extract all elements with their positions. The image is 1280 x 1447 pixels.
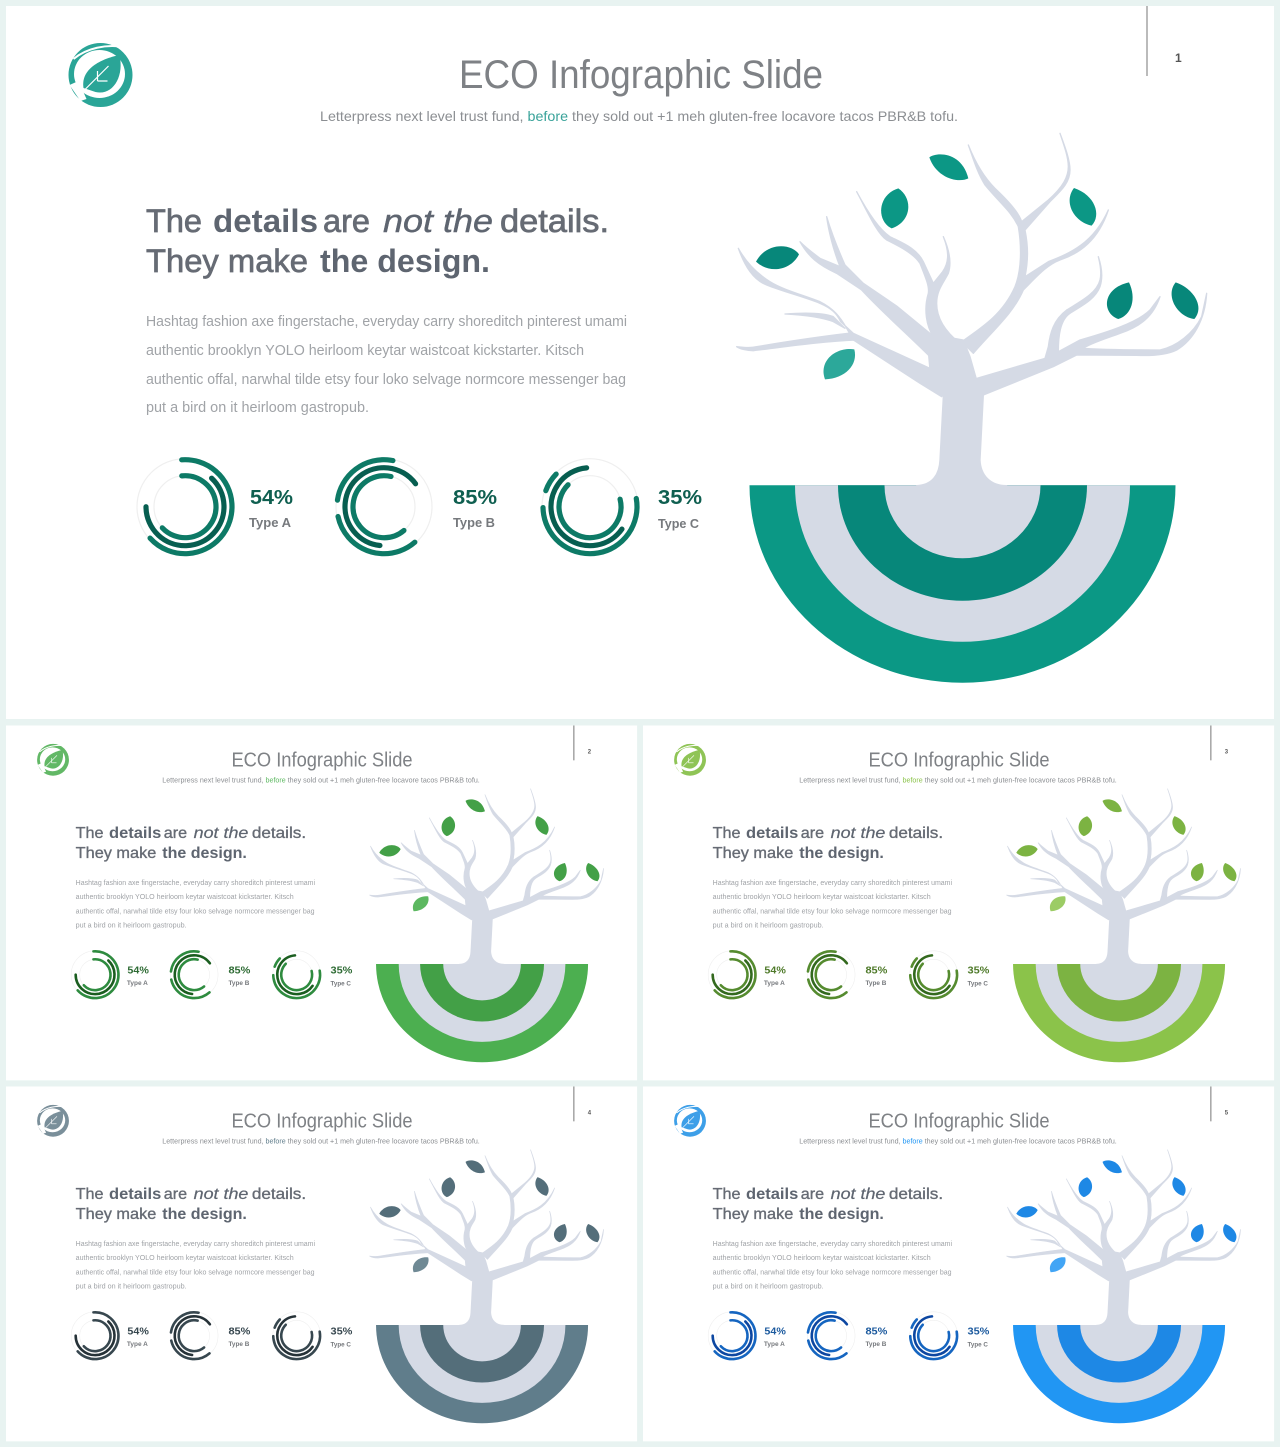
ring chart: Type A: Type A [127,980,148,987]
heading: not the [194,1186,249,1203]
ring chart: Type C: Type C [331,1341,351,1348]
ring chart: Type A: 54% [250,487,293,509]
heading: are [164,825,187,842]
ring chart: Type C: Type C [968,980,988,987]
heading: not the [383,203,493,239]
body text: authentic offal, narwhal tilde etsy four loko selvage normcore messenger bag [76,907,315,916]
ring chart: Type A: Type A [249,515,292,530]
body text: put a bird on it heirloom gastropub. [146,400,369,416]
body text: Hashtag fashion axe fingerstache, everyday carry shoreditch pinterest umami [713,878,952,887]
heading: are [801,825,824,842]
ring chart: Type A [68,947,149,1002]
slide 3 background [643,726,1274,1080]
ring chart: Type B: Type B [865,980,887,987]
page number [574,1086,592,1121]
heading: details [213,203,318,239]
subtitle: Letterpress next level trust fund, before they sold out +1 meh gluten-free locavore tacos PBR&B tofu. [799,1139,1117,1146]
semicircle soil bands [376,1325,588,1423]
slide 2 background [6,726,637,1080]
ring chart: Type A [130,452,293,562]
body text: authentic offal, narwhal tilde etsy four loko selvage normcore messenger bag [76,1268,315,1277]
body text: authentic brooklyn YOLO heirloom keytar waistcoat kickstarter. Kitsch [76,1253,294,1262]
heading: are [801,1186,824,1203]
heading: details [109,825,161,842]
heading: are [164,1186,187,1203]
body text: Hashtag fashion axe fingerstache, everyday carry shoreditch pinterest umami [76,878,315,887]
heading: details [746,825,798,842]
icon: leaf logo [37,1105,69,1137]
ring chart: Type A [705,947,786,1002]
semicircle soil bands [1013,1325,1225,1423]
heading: not the [831,825,886,842]
page number [1147,6,1182,76]
ring chart: Type C [530,446,702,567]
heading: the design. [162,845,247,862]
heading: the design. [162,1206,247,1223]
slide 4 background [6,1086,637,1441]
title: ECO Infographic Slide [231,1110,413,1132]
body text [146,314,627,416]
ring chart: Type B: 85% [453,487,497,509]
heading: details. [500,203,609,239]
slide 5 background [643,1086,1274,1441]
tree [370,789,604,964]
panel: slide 1 teal [6,6,1274,719]
panel: slide 4 slate [6,1086,637,1441]
panel: slide 3 lime [643,726,1274,1080]
heading: They make [713,845,793,862]
ring chart: Type C [267,945,353,1005]
ring chart: Type A: 54% [764,1326,786,1337]
ring chart: Type A: 54% [127,1326,149,1337]
ring chart: Type B: 85% [228,965,251,976]
heading [76,1186,306,1223]
heading [713,825,943,862]
heading: They make [76,845,156,862]
icon: leaf logo [674,1105,706,1137]
heading: They make [713,1206,793,1223]
body text: authentic offal, narwhal tilde etsy four loko selvage normcore messenger bag [713,907,952,916]
ring chart: Type B: Type B [228,980,250,987]
heading: The [713,825,741,842]
semicircle soil bands [750,485,1176,683]
semicircle soil bands [376,964,588,1062]
ring chart: Type B: Type B [453,515,495,530]
body text [76,878,315,930]
ring chart: Type B [318,440,497,573]
ring chart: Type A: 54% [127,965,149,976]
heading: the design. [320,243,490,279]
body text: put a bird on it heirloom gastropub. [76,921,187,930]
ring chart: Type A: 54% [764,965,786,976]
title: ECO Infographic Slide [459,53,823,97]
heading: details [746,1186,798,1203]
body text [76,1239,315,1291]
ring chart: Type B: Type B [228,1341,250,1348]
tree [1007,789,1241,964]
body text: authentic brooklyn YOLO heirloom keytar waistcoat kickstarter. Kitsch [713,892,931,901]
ring chart: Type C: 35% [968,1326,990,1337]
ring chart: Type B: 85% [228,1326,251,1337]
heading: The [76,1186,104,1203]
page number [574,726,592,760]
ring chart: Type A: Type A [764,980,785,987]
body text [713,1239,952,1291]
icon: leaf logo [674,744,706,776]
heading: The [146,203,202,239]
heading: details. [252,825,306,842]
page number [1211,726,1229,760]
ring chart: Type C [267,1306,353,1366]
heading: details. [889,825,943,842]
leaves [756,154,1198,379]
icon: leaf logo [37,744,69,776]
ring chart: Type B: 85% [865,965,888,976]
heading: They make [76,1206,156,1223]
heading: are [323,203,370,239]
body text [713,878,952,930]
leaves [1016,799,1236,911]
heading: the design. [799,1206,884,1223]
ring chart: Type A: Type A [127,1341,148,1348]
body text: put a bird on it heirloom gastropub. [76,1282,187,1291]
tree [1007,1150,1241,1325]
ring chart: Type C: 35% [331,965,353,976]
ring chart: Type C: Type C [331,980,351,987]
body text: authentic brooklyn YOLO heirloom keytar waistcoat kickstarter. Kitsch [76,892,294,901]
subtitle: Letterpress next level trust fund, before they sold out +1 meh gluten-free locavore tacos PBR&B tofu. [162,1139,480,1146]
body text: authentic brooklyn YOLO heirloom keytar waistcoat kickstarter. Kitsch [146,343,584,359]
heading [146,203,609,279]
subtitle: Letterpress next level trust fund, before they sold out +1 meh gluten-free locavore tacos PBR&B tofu. [162,778,480,785]
body text: put a bird on it heirloom gastropub. [713,921,824,930]
body text: Hashtag fashion axe fingerstache, everyday carry shoreditch pinterest umami [146,314,627,330]
heading: The [713,1186,741,1203]
panel: slide 2 green [6,726,637,1080]
ring chart: Type C: 35% [331,1326,353,1337]
ring chart: Type B [161,1303,251,1369]
leaves [379,799,599,911]
heading: details. [252,1186,306,1203]
page number: 1 [1175,51,1182,65]
body text: Hashtag fashion axe fingerstache, everyday carry shoreditch pinterest umami [713,1239,952,1248]
title: ECO Infographic Slide [868,749,1050,771]
heading: the design. [799,845,884,862]
tree [737,133,1207,486]
heading [713,1186,943,1223]
body text: Hashtag fashion axe fingerstache, everyday carry shoreditch pinterest umami [76,1239,315,1248]
heading: not the [831,1186,886,1203]
heading [76,825,306,862]
leaves [379,1160,599,1272]
ring chart: Type A [705,1308,786,1363]
ring chart: Type C: Type C [968,1341,988,1348]
page number [1211,1086,1229,1121]
body text: authentic brooklyn YOLO heirloom keytar waistcoat kickstarter. Kitsch [713,1253,931,1262]
ring chart: Type C: 35% [968,965,990,976]
ring chart: Type B [161,942,251,1008]
title: ECO Infographic Slide [231,749,413,771]
slide 1 background [6,6,1274,719]
body text: authentic offal, narwhal tilde etsy four loko selvage normcore messenger bag [713,1268,952,1277]
heading: They make [146,243,308,279]
icon: leaf logo [68,43,132,107]
ring chart: Type B [798,1303,888,1369]
heading: not the [194,825,249,842]
leaves [1016,1160,1236,1272]
ring chart: Type A: Type A [764,1341,785,1348]
ring chart: Type B: 85% [865,1326,888,1337]
ring chart: Type A [68,1308,149,1363]
page number: 2 [588,749,592,755]
heading: details [109,1186,161,1203]
semicircle soil bands [1013,964,1225,1062]
heading: details. [889,1186,943,1203]
ring chart: Type C [904,945,990,1005]
ring chart: Type B: Type B [865,1341,887,1348]
page number: 4 [588,1110,592,1116]
tree [370,1150,604,1325]
page number: 3 [1225,749,1229,755]
panel: slide 5 blue [643,1086,1274,1441]
subtitle: Letterpress next level trust fund, before they sold out +1 meh gluten-free locavore tacos PBR&B tofu. [799,778,1117,785]
ring chart: Type C: 35% [658,487,702,509]
body text: authentic offal, narwhal tilde etsy four loko selvage normcore messenger bag [146,372,626,388]
ring chart: Type C [904,1306,990,1366]
title: ECO Infographic Slide [868,1110,1050,1132]
ring chart: Type B [798,942,888,1008]
heading: The [76,825,104,842]
subtitle: Letterpress next level trust fund, before they sold out +1 meh gluten-free locavore tacos PBR&B tofu. [320,108,958,124]
page number: 5 [1225,1110,1229,1116]
ring chart: Type C: Type C [658,516,700,531]
body text: put a bird on it heirloom gastropub. [713,1282,824,1291]
